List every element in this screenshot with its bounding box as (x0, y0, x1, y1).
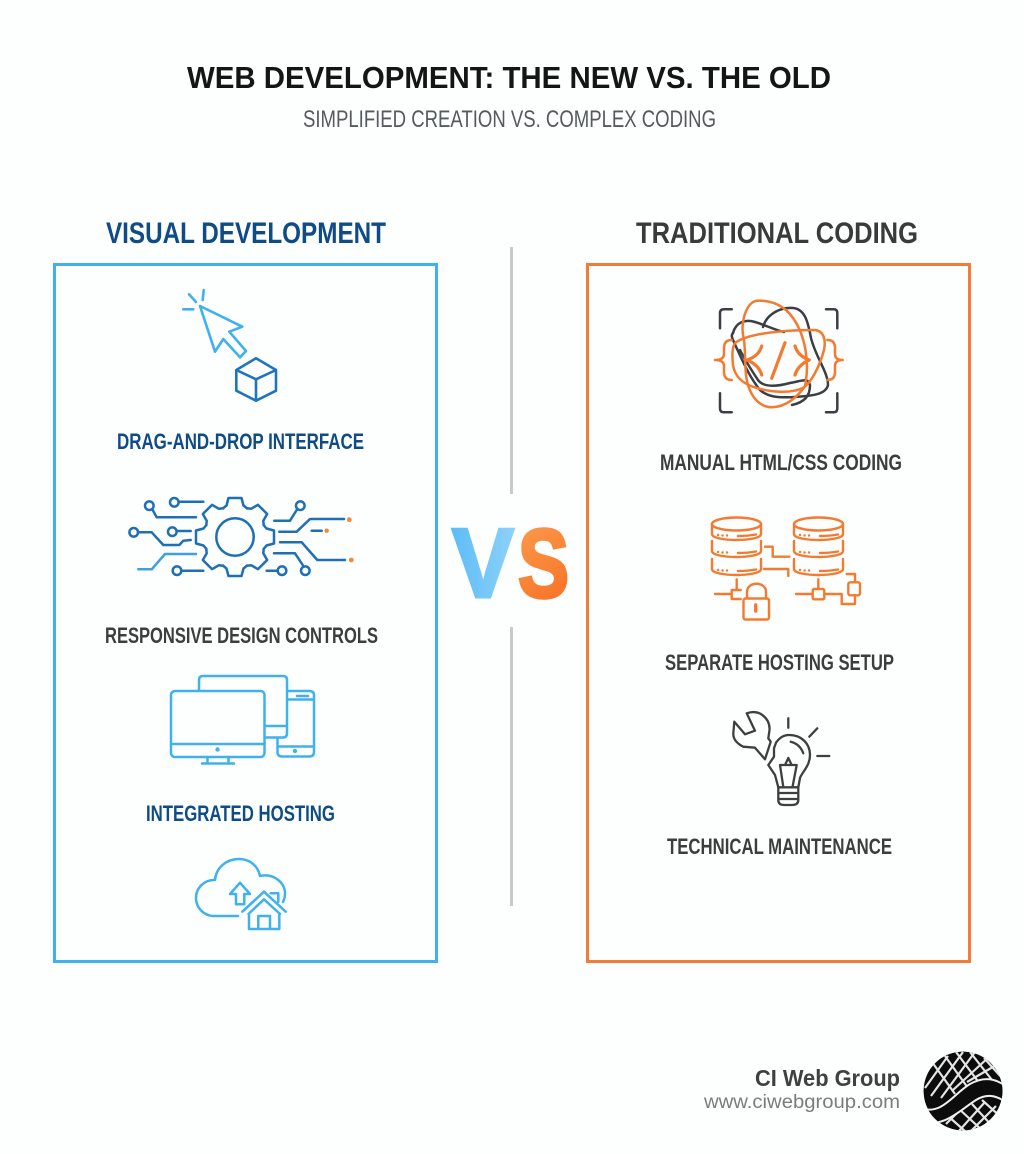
VS letter V: V (452, 508, 514, 618)
panel frame: visual development (54, 264, 436, 962)
icon: globe logo (924, 1052, 1002, 1130)
VS letter S: S (518, 509, 569, 618)
panel frame: traditional coding (588, 264, 970, 962)
heading: traditional coding: TRADITIONAL CODING (636, 217, 918, 250)
icon: cloud with house (196, 859, 286, 929)
subtitle: SIMPLIFIED CREATION VS. COMPLEX CODING (303, 106, 716, 133)
icon: tangled code (715, 301, 843, 412)
icon: responsive devices (171, 676, 314, 764)
brand url: www.ciwebgroup.com (703, 1092, 900, 1113)
icon: cursor dragging cube (183, 290, 276, 401)
divider and VS badge (452, 247, 569, 906)
icon: servers with lock (712, 518, 860, 620)
heading: visual development: VISUAL DEVELOPMENT (106, 217, 386, 250)
icon: wrench and broken bulb (733, 712, 829, 805)
label: separate hosting setup: SEPARATE HOSTING SETUP (665, 650, 894, 675)
label: manual html/css coding: MANUAL HTML/CSS CODING (660, 450, 902, 475)
title: WEB DEVELOPMENT: THE NEW VS. THE OLD (187, 60, 831, 95)
panel: visual development (54, 217, 436, 962)
brand block (703, 1052, 1008, 1132)
panel: traditional coding (588, 217, 970, 962)
brand name: CI Web Group (755, 1065, 900, 1091)
label: integrated hosting: INTEGRATED HOSTING (146, 801, 335, 826)
icon: gear with circuits (129, 498, 354, 576)
label: drag-and-drop interface: DRAG-AND-DROP INTERFACE (117, 429, 364, 454)
label: responsive design controls: RESPONSIVE DESIGN CONTROLS (105, 623, 378, 648)
label: technical maintenance: TECHNICAL MAINTENANCE (667, 834, 892, 859)
